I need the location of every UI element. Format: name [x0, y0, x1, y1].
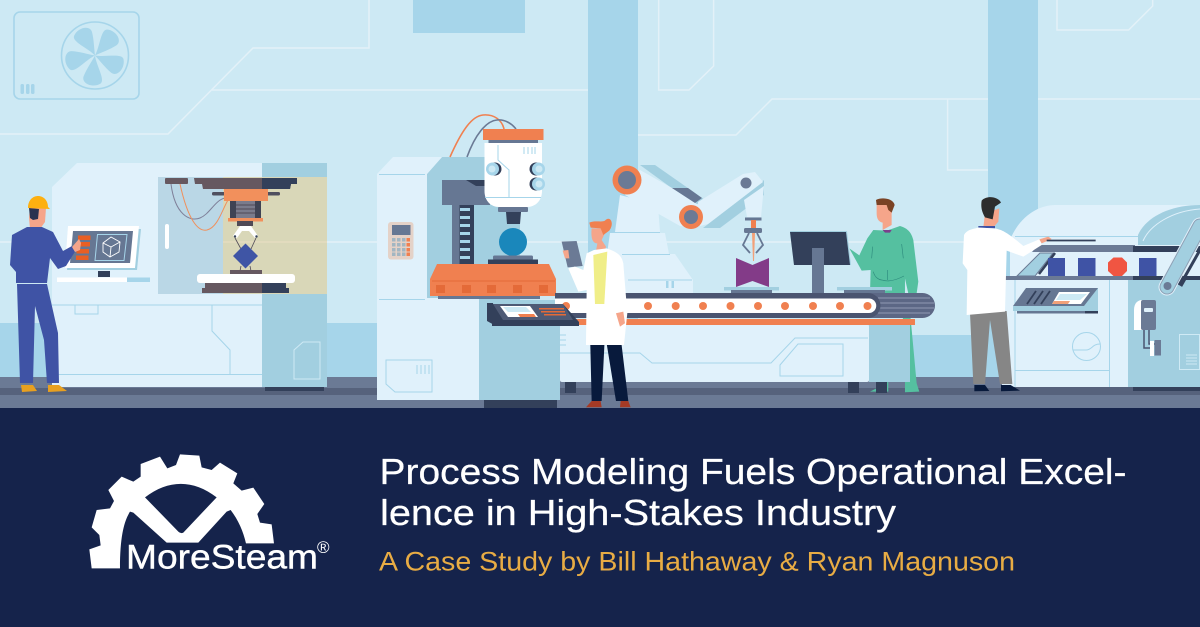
figure: engineer in white coat: [963, 197, 1096, 391]
panel: factory wall background: [0, 0, 1200, 410]
control terminal with 3D cube screen: [57, 226, 150, 282]
figure: scientist in lab coat with tablet: [562, 219, 631, 407]
press assembly: [165, 178, 297, 293]
icon: gear mark: [89, 454, 274, 568]
panel: navy footer: [0, 408, 1200, 627]
panel: central press machine: [377, 115, 560, 408]
orange press table: [430, 256, 556, 299]
registered mark: ®: [317, 538, 330, 557]
blue sphere workpiece: [499, 228, 527, 256]
gripper: [743, 218, 763, 261]
subtitle: authors: A Case Study by Bill Hathaway & Ryan Magnuson: [379, 546, 1015, 576]
title: Process Modeling Fuels Operational Excel-: [380, 451, 1126, 492]
icon: wall keypad: [388, 222, 414, 260]
logo: MoreSteam gear: [89, 454, 330, 576]
control console on press: [487, 303, 579, 326]
figure: technician in green scrubs: [849, 198, 919, 392]
logo wordmark: MoreSteam: [126, 538, 318, 576]
panel: factory floor: [0, 377, 1200, 409]
press column and head: [442, 180, 490, 265]
robotic tending arm: [1164, 226, 1200, 290]
wall controller box: [1134, 300, 1161, 356]
panel: right machine: [1002, 205, 1200, 391]
door panel: [1180, 334, 1200, 370]
purple workpiece on conveyor: [736, 258, 769, 287]
control console: [1013, 288, 1098, 314]
conveyor belt: [555, 293, 935, 325]
title: lence in High-Stakes Industry: [380, 492, 896, 533]
conveyor plates: [724, 287, 892, 293]
robot arm base: [607, 195, 693, 293]
white press head: [483, 129, 545, 224]
wires above press head: [450, 115, 516, 157]
conveyor machine base: [560, 325, 910, 393]
title: [380, 451, 1126, 533]
wires: [171, 184, 228, 230]
robot arm: [612, 165, 764, 261]
icon: wall ventilation fan: [14, 12, 139, 99]
monitor on stand: [790, 231, 851, 293]
panel: left CNC machine: [52, 163, 327, 391]
figure: engineer in hard hat: [10, 196, 81, 392]
conveyed parts: blue squares and red octagon: [1048, 258, 1156, 276]
